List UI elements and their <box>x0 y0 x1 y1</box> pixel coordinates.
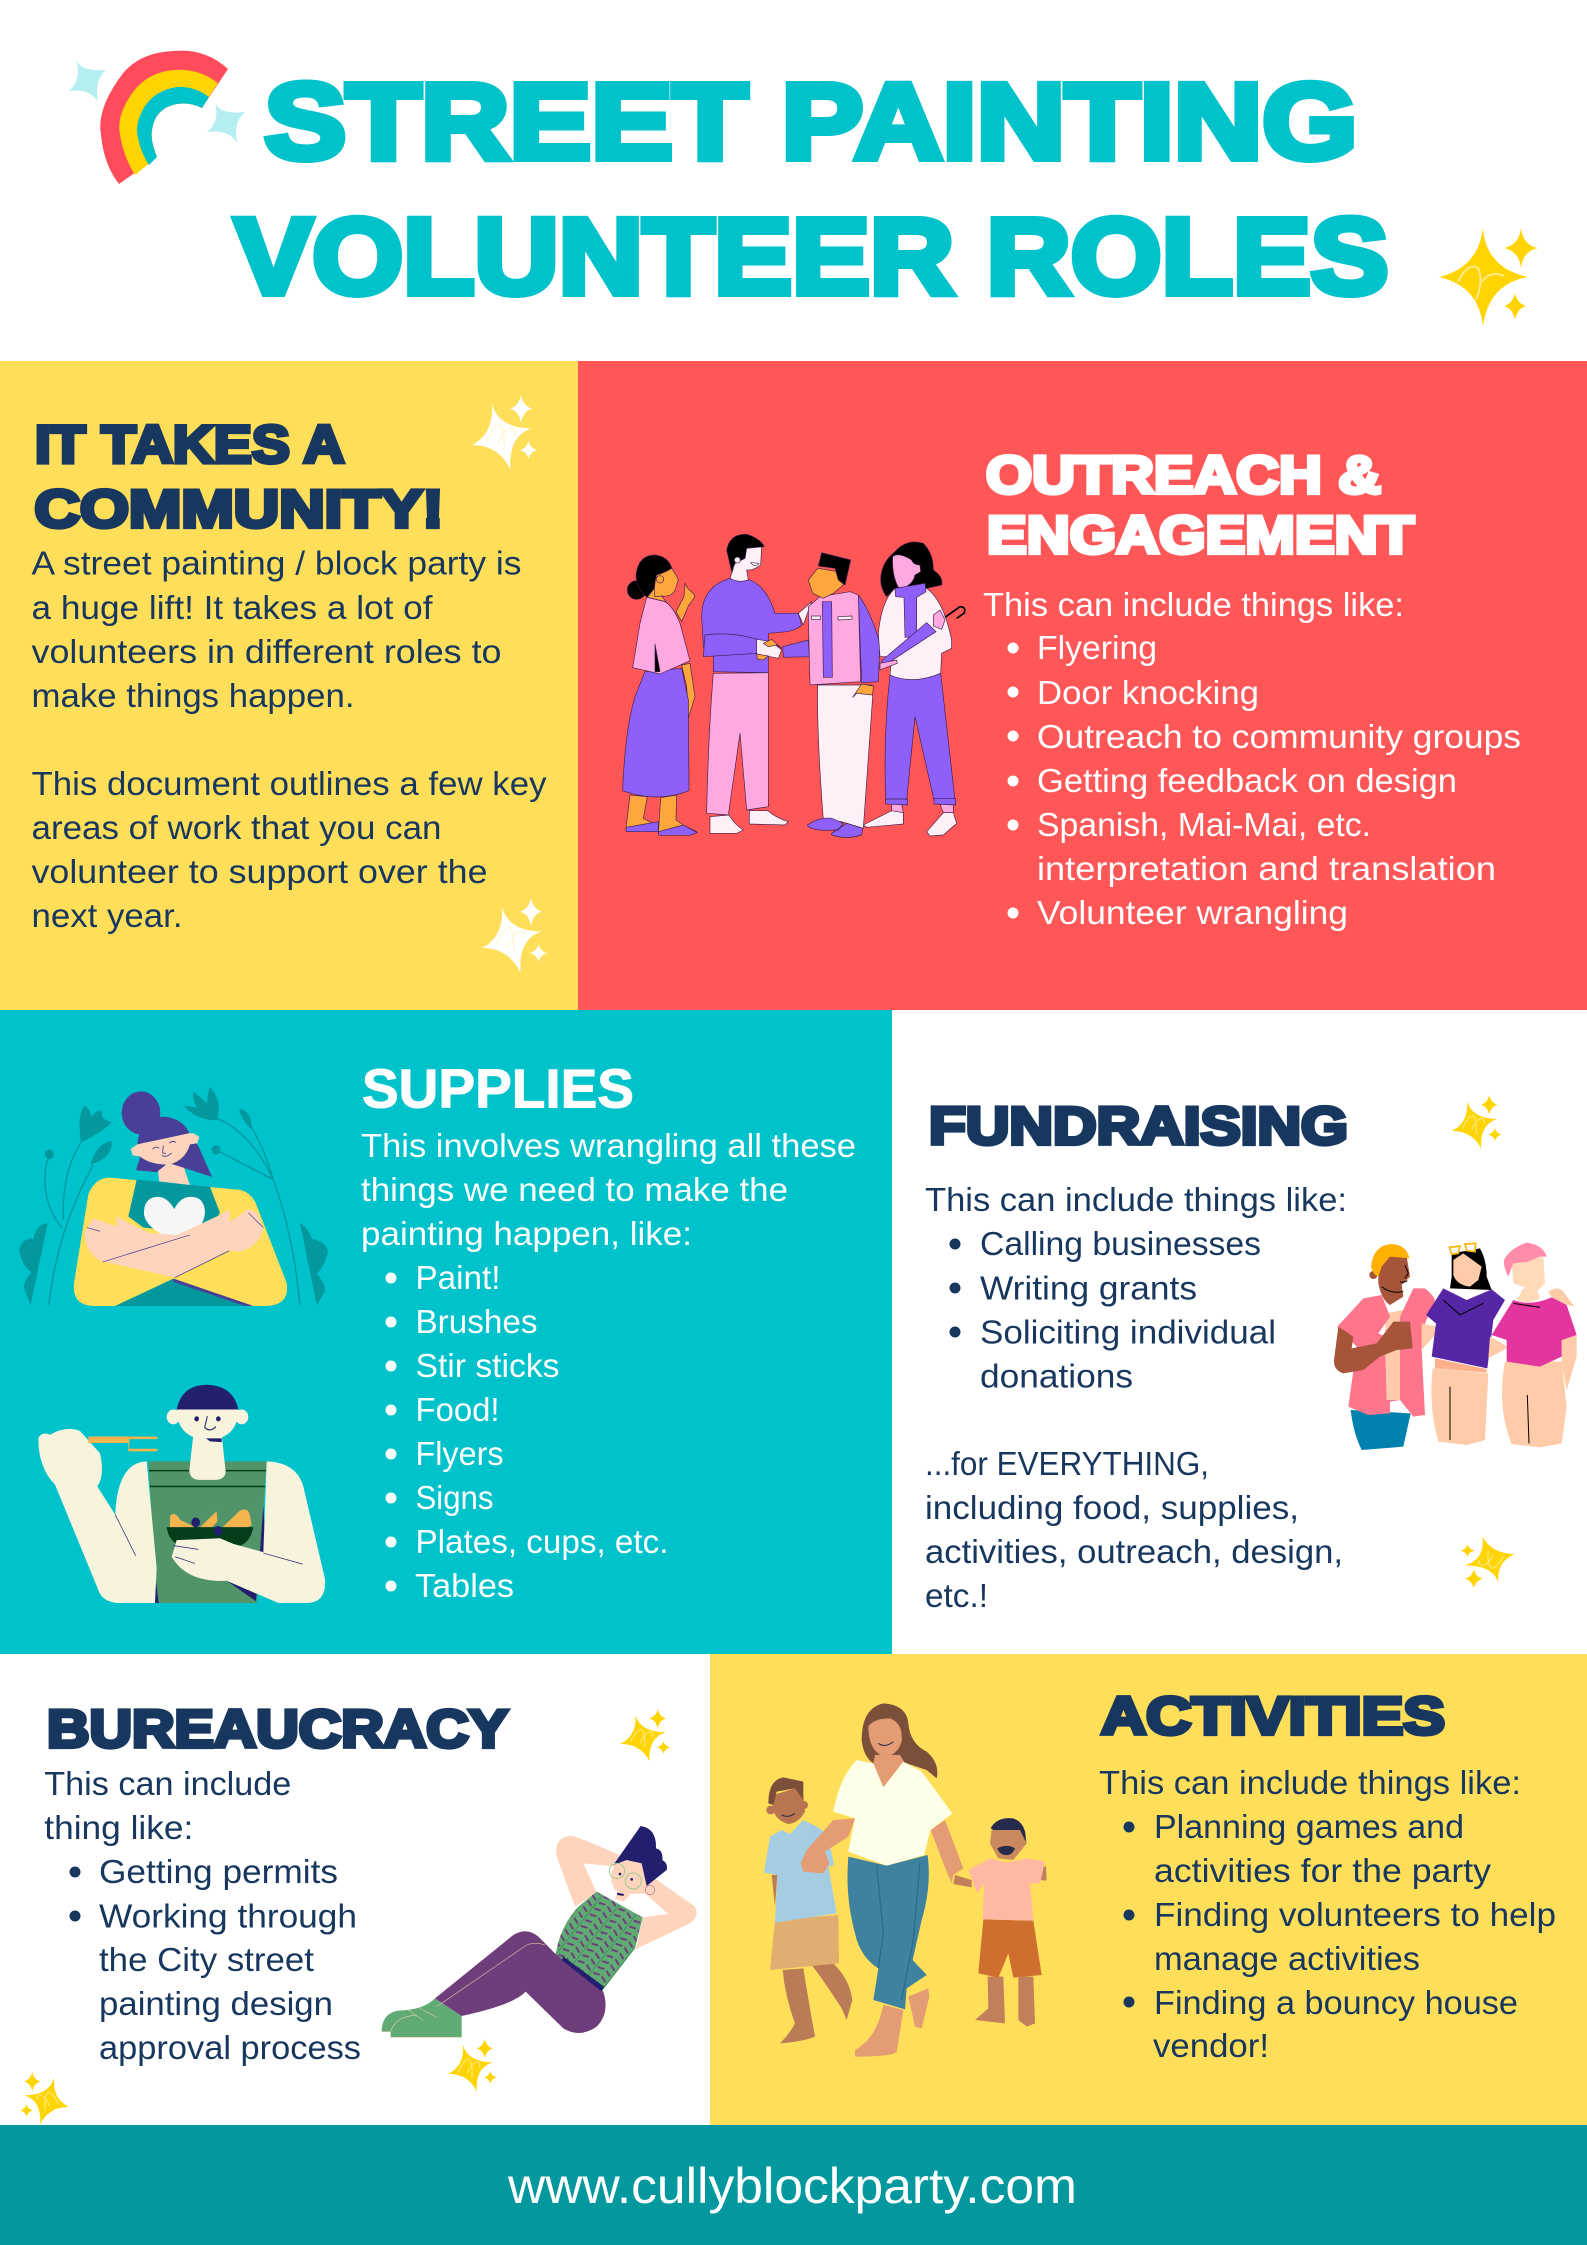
list: outreach tasks: This can include things like: <box>983 587 1404 624</box>
icon: cyan sparkles <box>69 59 245 143</box>
panel: activities <box>710 1654 1587 2125</box>
heading: bureaucracy: BUREAUCRACY <box>47 1700 508 1759</box>
mother <box>801 1703 963 2057</box>
list: outreach tasks: Volunteer wrangling <box>1037 895 1348 932</box>
title: STREET PAINTING <box>264 60 1358 182</box>
text block: intro <box>32 546 547 935</box>
list: outreach tasks: Outreach to community groups <box>1037 719 1521 756</box>
text block: intro: a huge lift! It takes a lot of <box>32 590 433 627</box>
list: fundraising <box>925 1182 1347 1615</box>
icon: yellow sparkles bottom left <box>20 2072 69 2124</box>
heading: activities: ACTIVITIES <box>1101 1687 1445 1746</box>
list: fundraising: donations <box>980 1358 1133 1396</box>
panel: fundraising <box>892 1010 1587 1654</box>
text block: intro: make things happen. <box>32 678 354 715</box>
plants <box>19 1087 328 1305</box>
list: supplies: things we need to make the <box>361 1172 788 1209</box>
man in white trousers <box>757 553 880 837</box>
list: fundraising: Writing grants <box>980 1270 1197 1308</box>
list: outreach tasks: Door knocking <box>1037 675 1259 712</box>
heading: outreach and engagement: OUTREACH & <box>986 446 1381 505</box>
boy on left <box>764 1777 852 2043</box>
text block: intro: A street painting / block party is <box>32 546 522 582</box>
list: supplies: This involves wrangling all these <box>361 1128 856 1165</box>
panel: outreach and engagement <box>578 361 1587 1010</box>
icon: white sparkles bottom <box>482 898 547 973</box>
list: activities: activities for the party <box>1154 1853 1491 1890</box>
list: fundraising: Calling businesses <box>980 1226 1261 1263</box>
icon: yellow sparkles top <box>1452 1095 1501 1149</box>
list: fundraising: activities, outreach, design, <box>925 1534 1343 1571</box>
list: supplies: Flyers <box>416 1436 504 1473</box>
friend two <box>1422 1243 1505 1445</box>
list: fundraising: Soliciting individual <box>980 1314 1276 1352</box>
list: outreach tasks: Flyering <box>1037 630 1157 667</box>
footer website link text: www.cullyblockparty.com <box>507 2158 1077 2214</box>
list: bureaucracy: thing like: <box>44 1810 193 1847</box>
heading: it takes a community <box>34 416 443 539</box>
text block: intro: volunteers in different roles to <box>32 634 502 671</box>
list: supplies: Plates, cups, etc. <box>416 1524 668 1561</box>
title: VOLUNTEER ROLES <box>234 196 1388 316</box>
list: supplies <box>361 1128 856 1605</box>
woman in skirt <box>623 555 697 835</box>
heading: outreach and engagement: ENGAGEMENT <box>987 506 1414 565</box>
heading: outreach and engagement <box>986 446 1414 565</box>
list: outreach tasks <box>983 587 1521 932</box>
icon: yellow sparkles top <box>620 1709 670 1761</box>
friend one <box>1334 1244 1435 1450</box>
list: bureaucracy: painting design <box>99 1986 333 2023</box>
list: supplies: Stir sticks <box>416 1348 560 1385</box>
heading: supplies: SUPPLIES <box>362 1058 634 1120</box>
list: bureaucracy: This can include <box>44 1766 291 1803</box>
illustration: three friends <box>1334 1243 1577 1450</box>
list: bureaucracy <box>44 1766 361 2067</box>
illustration: man eating from a bowl <box>38 1385 325 1603</box>
list: fundraising: including food, supplies, <box>925 1490 1299 1527</box>
list: bureaucracy: approval process <box>99 2030 361 2067</box>
list: fundraising: etc.! <box>925 1578 988 1615</box>
icon: white sparkles top <box>472 395 537 470</box>
heading: it takes a community: COMMUNITY! <box>34 480 443 539</box>
list: bureaucracy: Getting permits <box>99 1854 338 1891</box>
footer <box>0 2125 1587 2245</box>
panel: bureaucracy <box>0 1654 710 2125</box>
list: activities: Finding a bouncy house <box>1154 1985 1518 2022</box>
illustration: four people shaking hands <box>623 534 965 837</box>
panel: it takes a community <box>0 361 578 1010</box>
list: supplies: Brushes <box>416 1304 538 1341</box>
icon: rainbow <box>100 51 228 184</box>
illustration: woman hugging herself with plants <box>19 1087 328 1306</box>
boy on right <box>953 1818 1047 2027</box>
illustration: person doing a sit-up <box>382 1826 697 2037</box>
list: outreach tasks: Getting feedback on design <box>1037 763 1457 800</box>
list: supplies: Tables <box>415 1568 514 1605</box>
list: activities: Planning games and <box>1154 1809 1464 1846</box>
icon: yellow sparkles bottom middle <box>448 2039 497 2091</box>
list: supplies: Food! <box>416 1392 500 1429</box>
text block: intro: volunteer to support over the <box>32 854 487 891</box>
text block: intro: areas of work that you can <box>32 810 442 847</box>
list: outreach tasks: Spanish, Mai-Mai, etc. <box>1037 807 1371 844</box>
list: supplies: painting happen, like: <box>361 1216 692 1253</box>
woman with umbrella <box>863 542 965 836</box>
list: supplies: Signs <box>416 1480 494 1517</box>
text block: intro: next year. <box>32 898 182 935</box>
heading: it takes a community: IT TAKES A <box>35 416 344 474</box>
panel: supplies <box>0 1010 892 1654</box>
list: bureaucracy: Working through <box>99 1898 357 1936</box>
list: activities <box>1099 1765 1556 2065</box>
list: fundraising: This can include things like: <box>925 1182 1347 1219</box>
man in pink trousers <box>702 534 812 833</box>
title <box>234 60 1388 316</box>
list: activities: vendor! <box>1153 2028 1269 2065</box>
list: activities: This can include things like: <box>1099 1765 1521 1802</box>
heading: fundraising: FUNDRAISING <box>929 1097 1348 1156</box>
friend three <box>1488 1243 1577 1447</box>
list: activities: Finding volunteers to help <box>1154 1897 1556 1934</box>
header background <box>0 0 1587 361</box>
illustration: family holding hands <box>764 1703 1047 2057</box>
list: supplies: Paint! <box>416 1260 500 1297</box>
list: activities: manage activities <box>1154 1941 1420 1978</box>
icon: yellow sparkles bottom <box>1460 1537 1515 1588</box>
icon: yellow sparkles <box>1439 228 1538 327</box>
list: outreach tasks: interpretation and translation <box>1037 851 1496 888</box>
list: bureaucracy: the City street <box>99 1942 315 1979</box>
text block: intro: This document outlines a few key <box>32 766 547 803</box>
list: fundraising: ...for EVERYTHING, <box>925 1446 1209 1483</box>
